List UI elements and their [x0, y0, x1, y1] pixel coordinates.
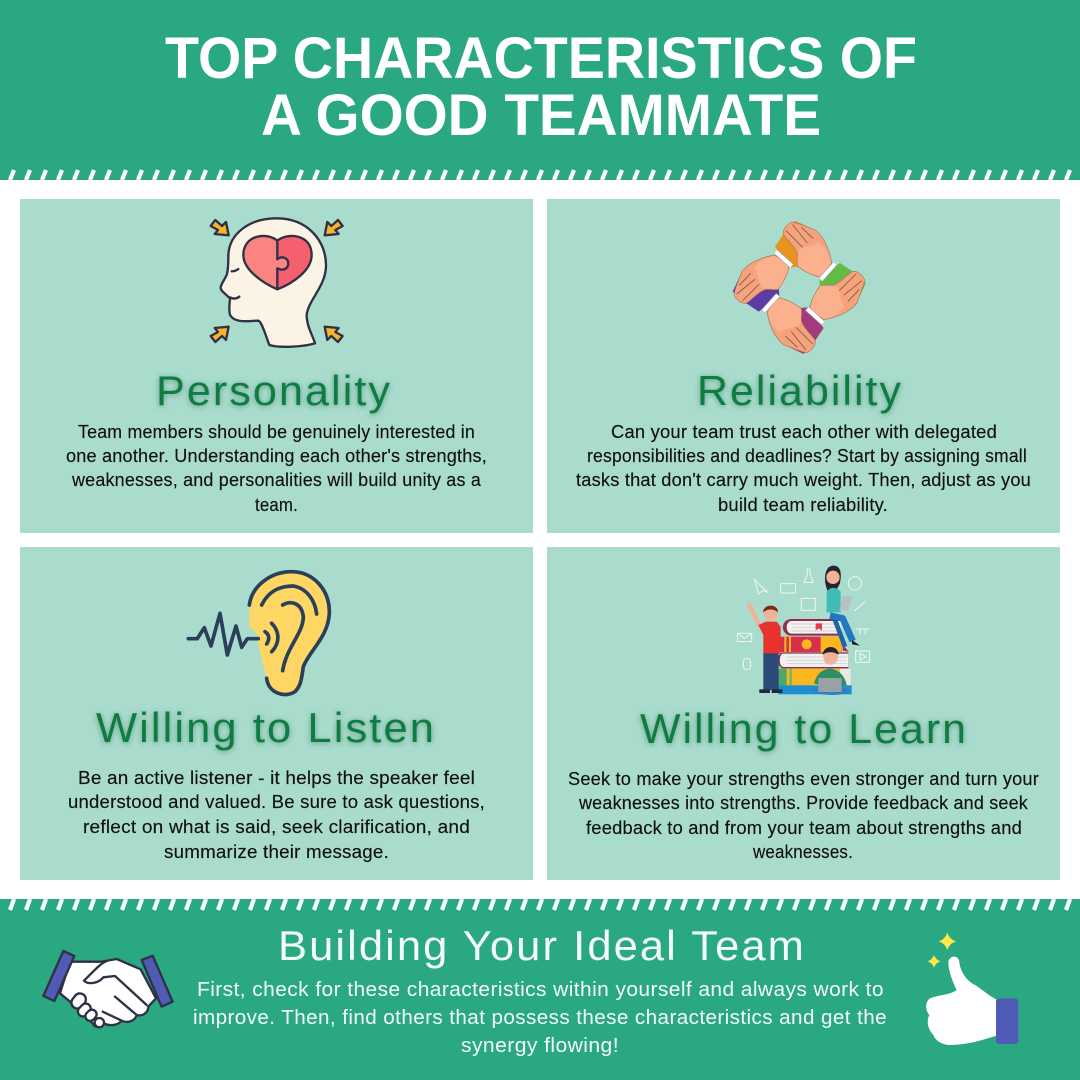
text: footer message: First, check for these characteristics within yourself and always work to [197, 979, 884, 1001]
icon: people with stack of books [737, 566, 870, 695]
icon: thumbs up with sparkles [926, 933, 1018, 1045]
text: personality: one another. Understanding each other's strengths, [66, 446, 487, 466]
title: TOP CHARACTERISTICS OF [165, 26, 917, 91]
text: footer message: improve. Then, find others that possess these characteristics and get the [193, 1007, 887, 1029]
heading: willing to listen: Willing to Listen [96, 704, 436, 751]
icon: four interlocked hands [733, 221, 866, 354]
text: personality [66, 422, 487, 515]
heading: reliability: Reliability [697, 367, 903, 414]
text: reliability: tasks that don't carry much weight. Then, adjust as you [576, 470, 1031, 490]
text: personality: Team members should be genuinely interested in [78, 422, 475, 442]
text: willing to learn: Seek to make your strengths even stronger and turn your [568, 769, 1039, 789]
text: willing to learn: feedback to and from your team about strengths and [586, 818, 1022, 838]
panel: personality [20, 199, 533, 533]
icon: head with puzzle heart [211, 218, 343, 347]
text: willing to listen: understood and valued. Be sure to ask questions, [68, 792, 485, 812]
text: footer message: synergy flowing! [461, 1035, 619, 1057]
heading: personality: Personality [156, 367, 392, 414]
icon: handshake [43, 951, 173, 1027]
text: reliability: build team reliability. [718, 495, 888, 515]
text: reliability [576, 422, 1031, 515]
panel: reliability [547, 199, 1060, 533]
text: personality: weaknesses, and personalities will build unity as a [71, 470, 482, 490]
panel: willing to learn [547, 547, 1060, 880]
title: A GOOD TEAMMATE [261, 83, 821, 148]
header band [0, 0, 1080, 180]
text: willing to listen [68, 768, 485, 862]
footer band [0, 899, 1080, 1080]
title [165, 26, 917, 148]
heading: building your ideal team: Building Your Ideal Team [278, 922, 806, 969]
text: willing to listen: reflect on what is said, seek clarification, and [83, 817, 470, 837]
text: personality: team. [255, 495, 298, 515]
text: willing to learn [568, 769, 1039, 862]
icon: ear with sound wave [188, 572, 329, 695]
text: reliability: Can your team trust each other with delegated [611, 422, 997, 442]
text: footer message [193, 979, 887, 1057]
text: willing to learn: weaknesses. [752, 842, 853, 862]
panel: willing to listen [20, 547, 533, 880]
text: reliability: responsibilities and deadlines? Start by assigning small [587, 446, 1027, 466]
heading: willing to learn: Willing to Learn [640, 705, 968, 752]
text: willing to listen: summarize their message. [164, 842, 389, 862]
text: willing to learn: weaknesses into strengths. Provide feedback and seek [578, 793, 1029, 813]
text: willing to listen: Be an active listener - it helps the speaker feel [78, 768, 475, 788]
